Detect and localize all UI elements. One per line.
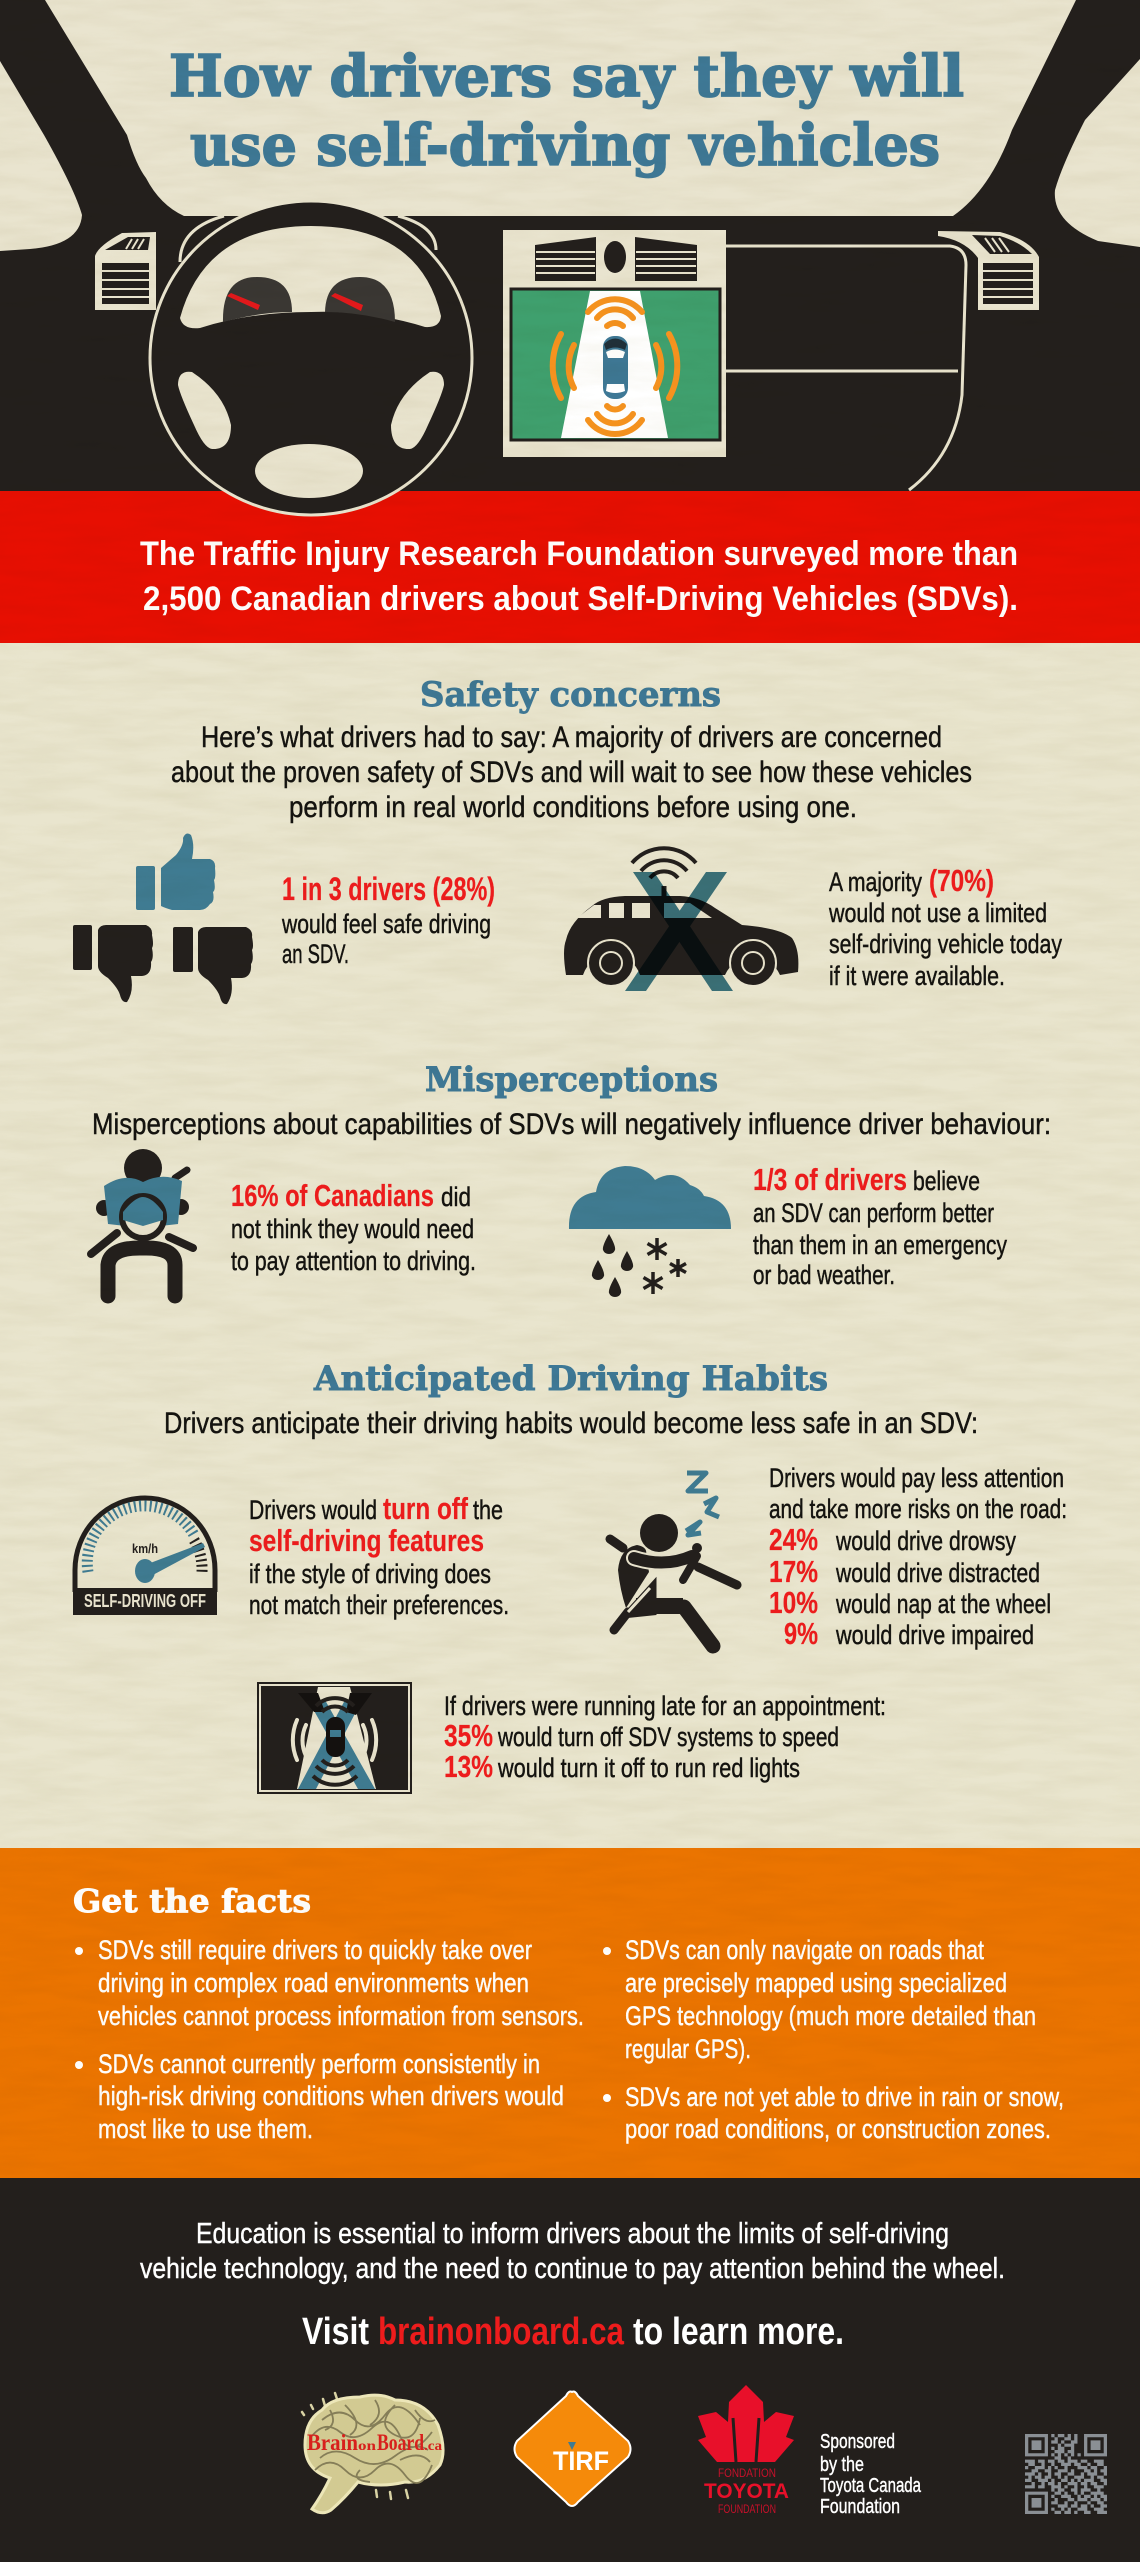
title: How drivers say they will <box>169 43 964 110</box>
stat: 1 in 3 drivers: an SDV. <box>282 939 349 969</box>
icon: car sensors with X <box>257 1682 412 1794</box>
logo: Brain on Board <box>302 2393 443 2513</box>
icon: speedometer self-driving off <box>73 1498 217 1615</box>
heading: Safety concerns <box>420 675 721 715</box>
logo wordmark: on <box>358 2439 376 2454</box>
bottom spoke opening <box>255 444 363 498</box>
fact: take over <box>75 1935 584 2031</box>
stat: 70 percent: if it were available. <box>829 961 1005 991</box>
fact: mapped roads: SDVs can only navigate on roads that <box>625 1935 984 1965</box>
banner text: The Traffic Injury Research Foundation surveyed more than <box>140 535 1018 573</box>
center console <box>503 230 726 457</box>
education message: Education is essential to inform drivers about the limits of self-driving <box>196 2218 949 2250</box>
fact: high-risk conditions <box>75 2049 564 2144</box>
stat: one third of drivers: 1/3 of drivers <box>753 1162 907 1197</box>
navigation screen <box>511 289 720 440</box>
text: turn off self-driving features <box>249 1491 509 1620</box>
education message: vehicle technology, and the need to continue to pay attention behind the wheel. <box>140 2253 1005 2285</box>
sponsor credit: Sponsored <box>820 2431 895 2453</box>
fact: take over: driving in complex road environments when <box>98 1968 529 1998</box>
text: drivers would pay less attention: 17% <box>769 1554 818 1589</box>
logo: Toyota Canada Foundation: TOYOTA <box>704 2480 789 2503</box>
logo: Toyota Canada Foundation: FONDATION <box>718 2466 776 2480</box>
text: drivers would pay less attention: Drivers would pay less attention <box>769 1463 1064 1493</box>
logo: Toyota Canada Foundation: FOUNDATION <box>718 2502 776 2516</box>
text: drivers would pay less attention: would drive impaired <box>835 1620 1034 1650</box>
dashboard silhouette <box>0 0 1140 491</box>
icon: sleeping driver with seat belt <box>610 1473 737 1646</box>
fact: mapped roads <box>603 1935 1036 2064</box>
panel: anticipated driving habits <box>73 1359 1067 1794</box>
intro paragraph: Here’s what drivers had to say: A majority of drivers are concerned <box>201 721 942 754</box>
sponsor credit: Toyota Canada <box>820 2475 922 2497</box>
stat: 1 in 3 drivers: would feel safe driving <box>281 909 491 939</box>
stat: 1 in 3 drivers: 1 in 3 drivers (28%) <box>282 871 495 907</box>
text: turn off self-driving features: self-driving features <box>249 1523 484 1558</box>
panel: footer <box>0 2178 1140 2562</box>
left gauge <box>223 277 292 322</box>
text: running late for an appointment: would turn off SDV systems to speed <box>497 1722 839 1752</box>
stat: 1 in 3 drivers <box>281 871 495 969</box>
text: running late for an appointment: 13% <box>444 1749 493 1784</box>
car from above <box>600 333 631 402</box>
text: drivers would pay less attention: 9% <box>784 1616 818 1651</box>
stat: 16 percent of Canadians: not think they would need <box>231 1214 474 1244</box>
text: turn off self-driving features: not match their preferences. <box>249 1590 509 1620</box>
stat: 16 percent of Canadians: did <box>441 1182 471 1212</box>
title: use self-driving vehicles <box>190 112 940 179</box>
fact: mapped roads: GPS technology (much more detailed than <box>625 2001 1036 2031</box>
icon: speedometer self-driving off: SELF-DRIVING OFF <box>84 1591 206 1611</box>
panel: get the facts <box>0 1848 1140 2178</box>
call to action: to learn more. <box>633 2311 844 2353</box>
fact: weather and road conditions: poor road conditions, or construction zones. <box>625 2114 1051 2144</box>
icon: cloud with rain and snow <box>569 1166 731 1297</box>
text: running late for an appointment: would turn it off to run red lights <box>497 1753 800 1783</box>
icon: driver reading a book <box>91 1149 193 1296</box>
windshield <box>45 0 1076 216</box>
glovebox outline <box>726 246 966 490</box>
lower left spoke opening <box>178 372 231 449</box>
text: drivers would pay less attention: would drive drowsy <box>835 1526 1016 1556</box>
panel: safety concerns <box>73 675 1062 1004</box>
stat: one third of drivers: believe <box>913 1166 980 1196</box>
fact: high-risk conditions: high-risk driving conditions when drivers would <box>98 2081 564 2111</box>
intro paragraph: perform in real world conditions before using one. <box>289 791 857 824</box>
intro paragraph <box>171 721 972 824</box>
heading: Misperceptions <box>425 1060 718 1100</box>
fact: mapped roads: regular GPS). <box>625 2034 751 2064</box>
cluster opening <box>180 226 441 328</box>
text: drivers would pay less attention: 24% <box>769 1522 818 1557</box>
text: drivers would pay less attention: 10% <box>769 1585 818 1620</box>
text: turn off self-driving features: turn off <box>383 1491 469 1526</box>
stat: 70 percent: would not use a limited <box>828 898 1047 928</box>
icon: thumbs up and two thumbs down <box>73 834 253 1004</box>
logo: TIRF: TIRF <box>553 2446 609 2476</box>
panel: red survey banner <box>0 491 1140 643</box>
heading: Get the facts <box>73 1882 311 1920</box>
stat: 70 percent <box>828 863 1062 991</box>
fact: high-risk conditions: SDVs cannot currently perform consistently in <box>98 2049 540 2079</box>
panel: dashboard header <box>0 0 1140 491</box>
text: running late for an appointment: 35% <box>444 1718 493 1753</box>
title <box>169 43 964 179</box>
sponsor credit: Foundation <box>820 2496 900 2518</box>
fact: weather and road conditions <box>603 2082 1064 2144</box>
fact: take over: SDVs still require drivers to quickly take over <box>98 1935 532 1965</box>
fact: take over: vehicles cannot process information from sensors. <box>98 2001 584 2031</box>
banner text: 2,500 Canadian drivers about Self-Driving Vehicles (SDVs). <box>143 580 1018 618</box>
text: drivers would pay less attention: would nap at the wheel <box>835 1589 1051 1619</box>
intro paragraph: about the proven safety of SDVs and will wait to see how these vehicles <box>171 756 972 789</box>
fact: high-risk conditions: most like to use them. <box>98 2114 313 2144</box>
education message <box>140 2218 1005 2285</box>
logo wordmark: Brain <box>307 2430 358 2455</box>
steering wheel <box>150 201 472 515</box>
stat: 70 percent: (70%) <box>929 863 994 898</box>
icon: speedometer self-driving off: km/h <box>132 1541 158 1556</box>
stat: one third of drivers <box>753 1162 1007 1290</box>
text: drivers would pay less attention <box>769 1463 1067 1651</box>
left air vent <box>95 232 156 310</box>
sponsor credit <box>820 2431 922 2518</box>
stat: one third of drivers: an SDV can perform better <box>753 1198 994 1228</box>
text: turn off self-driving features: if the style of driving does <box>249 1559 491 1589</box>
stat: one third of drivers: than them in an emergency <box>753 1230 1007 1260</box>
text: turn off self-driving features: the <box>473 1495 503 1525</box>
stat: 70 percent: self-driving vehicle today <box>829 929 1062 959</box>
call to action: Visit <box>302 2311 369 2353</box>
subheading: Drivers anticipate their driving habits would become less safe in an SDV: <box>164 1407 978 1440</box>
text: drivers would pay less attention: would drive distracted <box>835 1558 1040 1588</box>
stat: 16 percent of Canadians <box>231 1178 476 1276</box>
icon: connected car with X <box>564 848 798 991</box>
call to action: brainonboard.ca <box>378 2311 625 2353</box>
stat: 16 percent of Canadians: 16% of Canadians <box>231 1178 434 1213</box>
left side window <box>0 61 82 251</box>
stat: 70 percent: A majority <box>829 867 922 897</box>
text: running late for an appointment: If drivers were running late for an appointment: <box>444 1691 886 1721</box>
panel: misperceptions <box>91 1060 1051 1297</box>
text: turn off self-driving features: Drivers would <box>249 1495 377 1525</box>
logo wordmark: .ca <box>424 2439 442 2454</box>
banner text <box>140 535 1018 618</box>
lower right spoke opening <box>391 372 444 449</box>
fact: mapped roads: are precisely mapped using specialized <box>625 1968 1007 1998</box>
heading: Anticipated Driving Habits <box>313 1359 828 1399</box>
sponsor credit: by the <box>820 2454 864 2476</box>
logo: TIRF <box>514 2392 630 2506</box>
stat: 16 percent of Canadians: to pay attention to driving. <box>231 1246 476 1276</box>
right air vent <box>938 231 1039 310</box>
right gauge <box>325 277 395 322</box>
text: running late for an appointment <box>444 1691 886 1784</box>
logo: Toyota Canada Foundation <box>698 2385 794 2516</box>
console vents <box>535 237 697 281</box>
stat: one third of drivers: or bad weather. <box>753 1260 895 1290</box>
call to action <box>302 2311 844 2353</box>
steering wheel stalks <box>180 216 436 262</box>
right side window <box>1055 59 1140 247</box>
logo wordmark <box>307 2430 442 2455</box>
logo wordmark: Board <box>377 2430 424 2455</box>
QR code <box>1025 2434 1107 2514</box>
